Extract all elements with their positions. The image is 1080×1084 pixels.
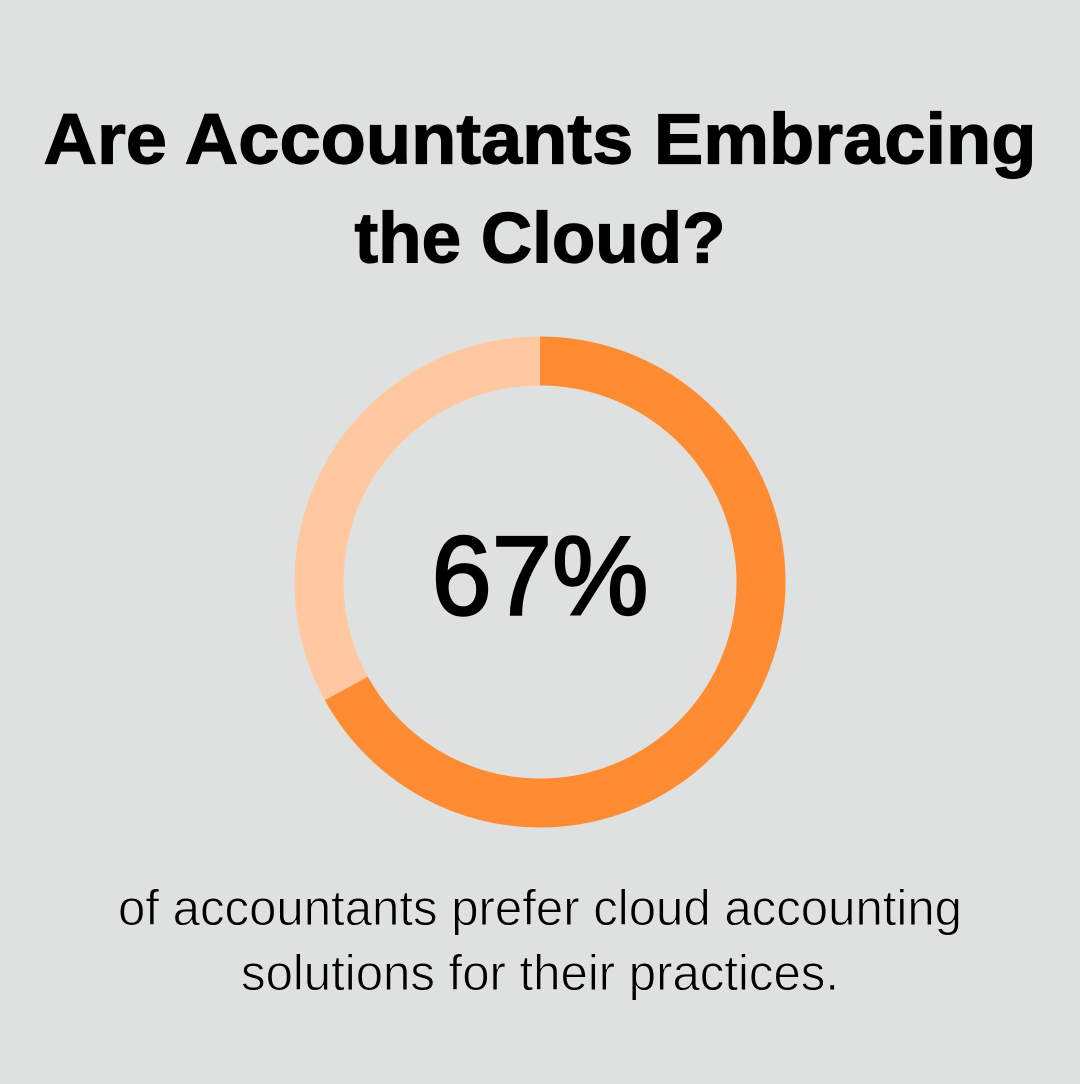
title (44, 100, 1036, 278)
title: the Cloud? (354, 200, 726, 278)
donut remainder segment (319, 361, 540, 688)
caption: solutions for their practices. (241, 945, 839, 1001)
title: Are Accountants Embracing (44, 100, 1036, 180)
donut highlighted segment (346, 361, 761, 803)
caption: of accountants prefer cloud accounting (118, 880, 962, 936)
donut chart: 67% (319, 361, 761, 803)
caption (118, 880, 962, 1001)
big percentage: 67% (432, 514, 648, 638)
